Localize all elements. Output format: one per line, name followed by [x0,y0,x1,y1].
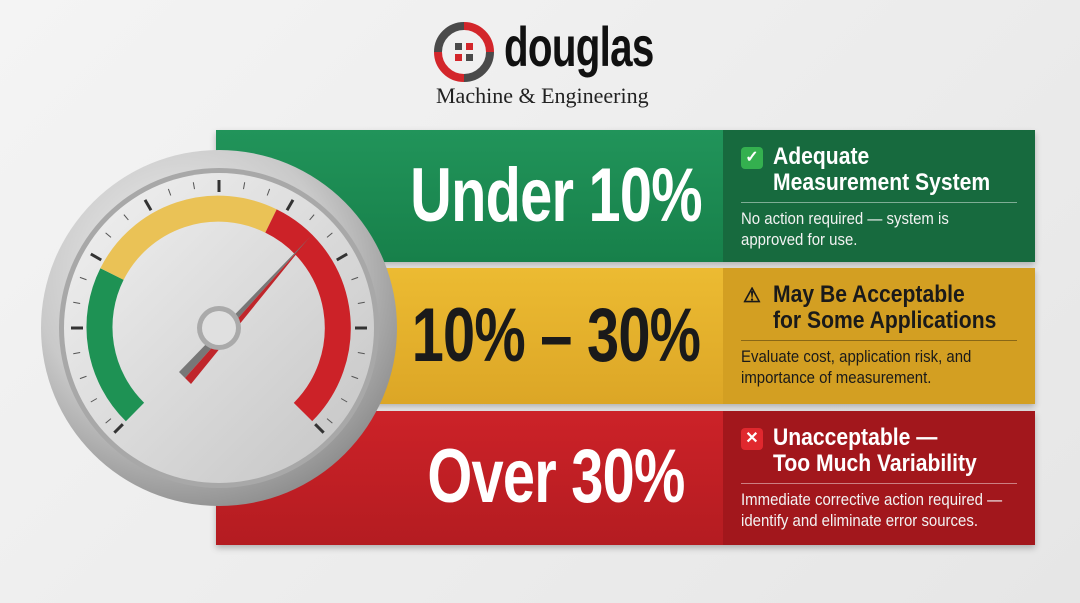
description [741,490,1002,530]
icon: check: ✓ [745,149,759,166]
heading: Adequate [773,143,869,170]
description: Evaluate cost, application risk, and [741,347,971,366]
description [741,209,949,249]
description: importance of measurement. [741,368,931,387]
panel: 10-30% [216,268,1035,404]
big label: Over 30% [427,434,685,519]
logo subtitle: Machine & Engineering [436,83,649,108]
description: No action required — system is [741,209,949,228]
icon: warning: ⚠ [743,285,761,307]
icon: cross: ✕ [745,430,759,447]
info box [723,411,1035,545]
logo mark [434,22,494,82]
heading [773,424,977,477]
gauge [41,150,397,506]
heading: May Be Acceptable [773,281,965,308]
icon: check [741,147,763,169]
big label: 10% – 30% [412,293,700,378]
panel: over 30% [216,411,1035,545]
heading: for Some Applications [773,307,996,334]
info box [723,130,1035,262]
heading [773,281,996,334]
heading: Too Much Variability [773,450,977,477]
heading: Measurement System [773,169,990,196]
description: identify and eliminate error sources. [741,511,978,530]
info box [723,268,1035,404]
big label: Under 10% [410,153,702,238]
description: approved for use. [741,230,857,249]
description [741,347,971,387]
heading: Unacceptable — [773,424,937,451]
logo [434,15,654,108]
icon: cross [741,428,763,450]
panel: under 10% [216,130,1035,262]
description: Immediate corrective action required — [741,490,1002,509]
logo wordmark: douglas [504,15,654,78]
heading [773,143,990,196]
